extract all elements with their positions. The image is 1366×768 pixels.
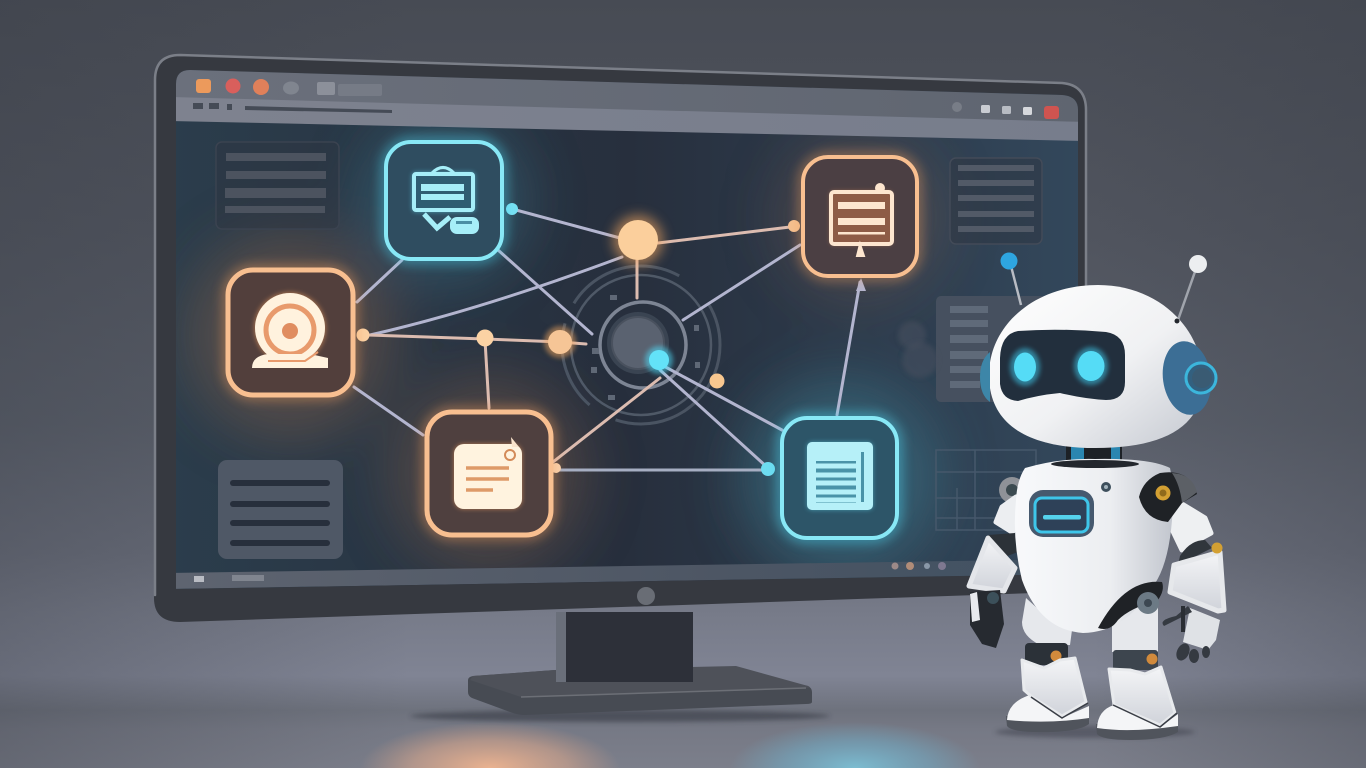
screen glow wash	[185, 115, 945, 578]
side panel: bottom left	[218, 460, 343, 559]
address bar	[193, 103, 392, 113]
icon: presentation board	[830, 183, 892, 256]
right ear	[1158, 338, 1216, 418]
eyes	[1010, 348, 1040, 386]
right arm	[1162, 504, 1224, 663]
antennae	[1000, 252, 1207, 320]
card: orange webcam	[228, 270, 353, 395]
right shoulder	[1139, 472, 1197, 522]
icon: webcam	[252, 292, 328, 368]
central dial	[562, 266, 720, 424]
screen	[170, 60, 1090, 600]
right hand	[1183, 608, 1220, 650]
antenna base	[1174, 318, 1180, 324]
card: cyan chat	[386, 142, 502, 259]
hub node top	[613, 215, 663, 265]
monitor	[154, 54, 1224, 740]
monitor stand	[468, 612, 812, 715]
small nodes	[356, 203, 800, 476]
side panel: top right	[950, 158, 1042, 244]
robot torso	[1015, 459, 1173, 633]
network nodes	[356, 203, 800, 476]
monitor bezel	[154, 54, 1087, 622]
card: orange note	[427, 412, 551, 535]
robot head	[989, 285, 1203, 448]
stand base	[468, 666, 812, 715]
icon: chat	[412, 168, 479, 234]
window buttons	[196, 78, 382, 96]
browser toolbar	[170, 64, 1085, 141]
card: orange presentation	[803, 157, 917, 276]
hub node mid	[544, 326, 576, 358]
left leg	[1006, 598, 1089, 732]
left ear	[980, 352, 990, 402]
robot	[969, 252, 1224, 740]
status bar	[170, 559, 1085, 589]
visor	[1000, 330, 1125, 401]
icon: note	[454, 437, 522, 509]
side panel: top left	[216, 142, 339, 229]
chest screen	[1029, 490, 1094, 537]
side panel: mid right	[898, 296, 1046, 402]
power button	[637, 587, 655, 605]
toolbar icons	[952, 102, 1059, 119]
right leg	[1096, 590, 1178, 740]
chest dot	[1101, 482, 1111, 492]
network connections	[354, 210, 860, 470]
icon: document	[807, 442, 873, 510]
left hand	[970, 590, 1004, 648]
cyan node	[645, 346, 673, 374]
hip joint	[1098, 582, 1163, 629]
left arm	[969, 477, 1025, 648]
neck	[1066, 445, 1122, 469]
side panel: bottom right	[936, 450, 1036, 530]
arrow to orange card	[856, 278, 866, 291]
card: cyan document	[782, 418, 897, 538]
stand neck	[556, 612, 693, 682]
